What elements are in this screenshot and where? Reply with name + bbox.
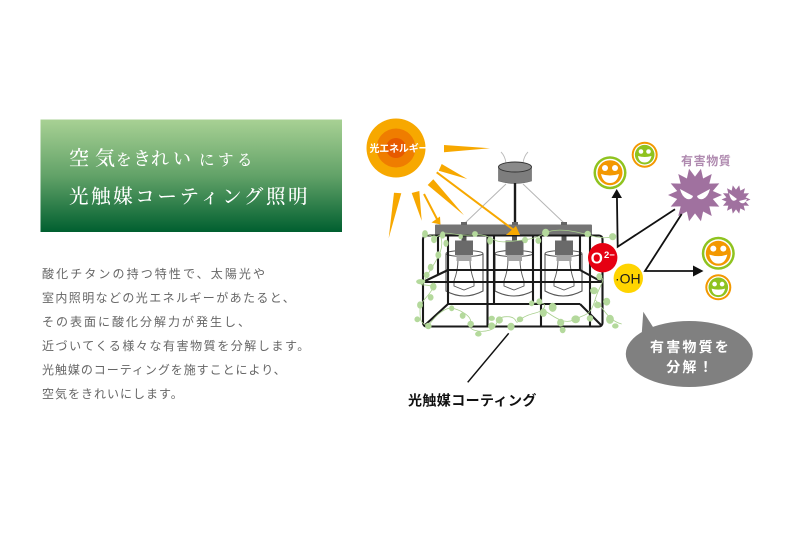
O2- bubble: 2− bbox=[604, 250, 615, 261]
smiley: small top bbox=[632, 142, 658, 168]
icon: large germ bbox=[668, 169, 722, 221]
pendant lamp ceiling mount bbox=[465, 152, 564, 225]
title line 2: 光触媒コーティング照明 bbox=[69, 186, 310, 208]
arrow: to upper smiley bbox=[612, 189, 675, 247]
coating callout bbox=[408, 333, 537, 408]
coating callout: 光触媒コーティング bbox=[408, 392, 537, 408]
body text bbox=[42, 266, 311, 401]
title line 1: る bbox=[237, 152, 253, 169]
body text: 室内照明などの光エネルギーがあたると、 bbox=[42, 290, 296, 305]
OH bubble: ·OH bbox=[615, 270, 641, 286]
title line 1: に bbox=[199, 152, 215, 169]
smiley: small lower bbox=[705, 274, 731, 300]
lamp bar bbox=[435, 222, 592, 235]
title line 1: す bbox=[218, 152, 234, 169]
wire frame bbox=[423, 236, 602, 326]
title line 1: い bbox=[173, 149, 191, 169]
O2- bubble bbox=[588, 243, 617, 272]
icon: sun with label bbox=[366, 118, 428, 178]
harmful substances label: 有害物質 bbox=[681, 153, 731, 168]
smiley: large top bbox=[594, 156, 626, 189]
body text: その表面に酸化分解力が発生し、 bbox=[42, 314, 252, 329]
body text: 近づいてくる様々な有害物質を分解します。 bbox=[42, 338, 311, 353]
title line 1: れ bbox=[151, 149, 169, 169]
speech bubble bbox=[626, 312, 753, 387]
title line 1: 気 bbox=[95, 147, 115, 170]
lamp bulbs and glass shades bbox=[446, 235, 582, 296]
title banner bbox=[40, 120, 342, 232]
OH bubble bbox=[614, 264, 643, 293]
lamp 1 bbox=[446, 235, 483, 296]
smiley: large lower bbox=[702, 237, 735, 270]
speech bubble: 有害物質を bbox=[650, 339, 731, 355]
body text: 酸化チタンの持つ特性で、太陽光や bbox=[42, 266, 267, 281]
O2- bubble: O bbox=[591, 250, 603, 268]
arrow: to lower smiley bbox=[645, 214, 704, 276]
title line 1: き bbox=[133, 149, 151, 169]
icon: sun with label: 光エネルギー bbox=[370, 142, 428, 155]
lamp 3 bbox=[545, 235, 582, 296]
body text: 光触媒のコーティングを施すことにより、 bbox=[42, 362, 287, 377]
title line 1: を bbox=[116, 151, 132, 169]
title line 1: 空 bbox=[69, 147, 89, 170]
speech bubble: 分解！ bbox=[666, 359, 715, 375]
body text: 空気をきれいにします。 bbox=[42, 386, 184, 401]
green vines with leaves bbox=[415, 229, 622, 336]
lamp 2 bbox=[495, 235, 533, 296]
icon: small germ bbox=[722, 185, 750, 214]
sun rays bbox=[389, 145, 490, 238]
orange arrows of light bbox=[424, 172, 520, 235]
